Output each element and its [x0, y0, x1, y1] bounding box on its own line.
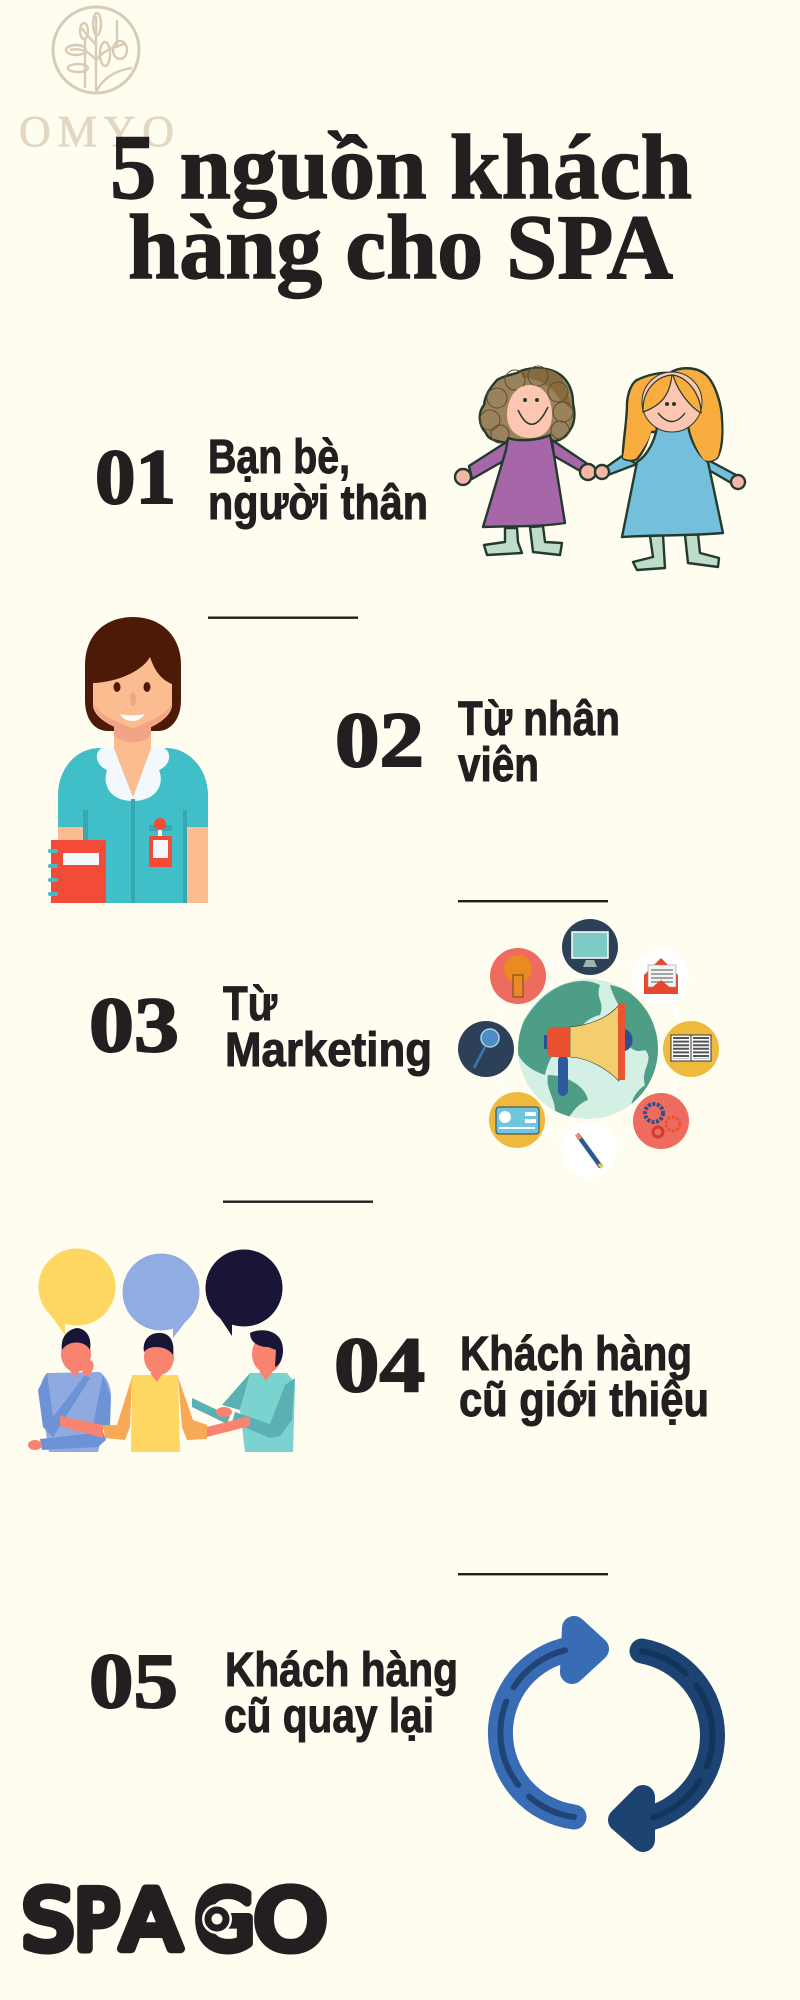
title: hàng cho SPA [128, 196, 673, 298]
person left [28, 1328, 111, 1452]
logo: SPAGO [22, 1874, 327, 1969]
illustration: marketing globe and megaphone [458, 919, 719, 1178]
item 02 label [458, 693, 620, 792]
item 05 label [224, 1644, 458, 1743]
item 04 label: Khách hàng [460, 1328, 692, 1381]
item 01 label: Bạn bè, [208, 431, 350, 484]
title [110, 116, 692, 298]
speech bubbles [38, 1248, 282, 1338]
girl 2 [595, 368, 745, 570]
illustration: three people talking [28, 1248, 295, 1452]
divider 2 [458, 900, 608, 902]
title: 5 nguồn khách [110, 116, 692, 218]
divider 3 [223, 1200, 373, 1203]
logo: OMYO [19, 7, 174, 156]
logo: OMYO: OMYO [19, 107, 174, 156]
divider 4 [458, 1573, 608, 1575]
megaphone [544, 1003, 632, 1096]
person middle [60, 1333, 250, 1452]
logo: SPAGO: G [195, 1874, 255, 1969]
item 03 label [223, 978, 432, 1077]
item 01 label [208, 431, 428, 530]
arrow right navy [620, 1651, 713, 1840]
logo: SPAGO: A [121, 1874, 181, 1969]
item 02 label: viên [458, 739, 539, 792]
divider 1 [208, 616, 358, 619]
item 02 number: 02 [335, 696, 424, 783]
item 04 number: 04 [334, 1321, 425, 1408]
illustration: two girls holding hands [455, 366, 745, 570]
item 01 label: người thân [208, 477, 428, 530]
item 04 label: cũ giới thiệu [459, 1374, 709, 1427]
item 02 label: Từ nhân [458, 693, 620, 746]
item 05 number: 05 [89, 1637, 178, 1724]
item 05 label: cũ quay lại [224, 1690, 434, 1743]
girl 1 [455, 366, 596, 555]
item 05 label: Khách hàng [225, 1644, 458, 1697]
item 04 label [459, 1328, 709, 1427]
illustration: nurse with notebook [48, 617, 208, 903]
item 01 number: 01 [95, 433, 176, 520]
item 03 label: Từ [223, 978, 277, 1031]
item 03 label: Marketing [225, 1024, 432, 1077]
icon: circular arrows [500, 1628, 713, 1840]
item 03 number: 03 [89, 981, 179, 1068]
person right [192, 1330, 295, 1452]
logo: SPAGO: P [74, 1874, 119, 1969]
logo: SPAGO: O [254, 1874, 327, 1969]
logo: SPAGO: S [22, 1874, 74, 1969]
arrow left blue [500, 1628, 597, 1817]
